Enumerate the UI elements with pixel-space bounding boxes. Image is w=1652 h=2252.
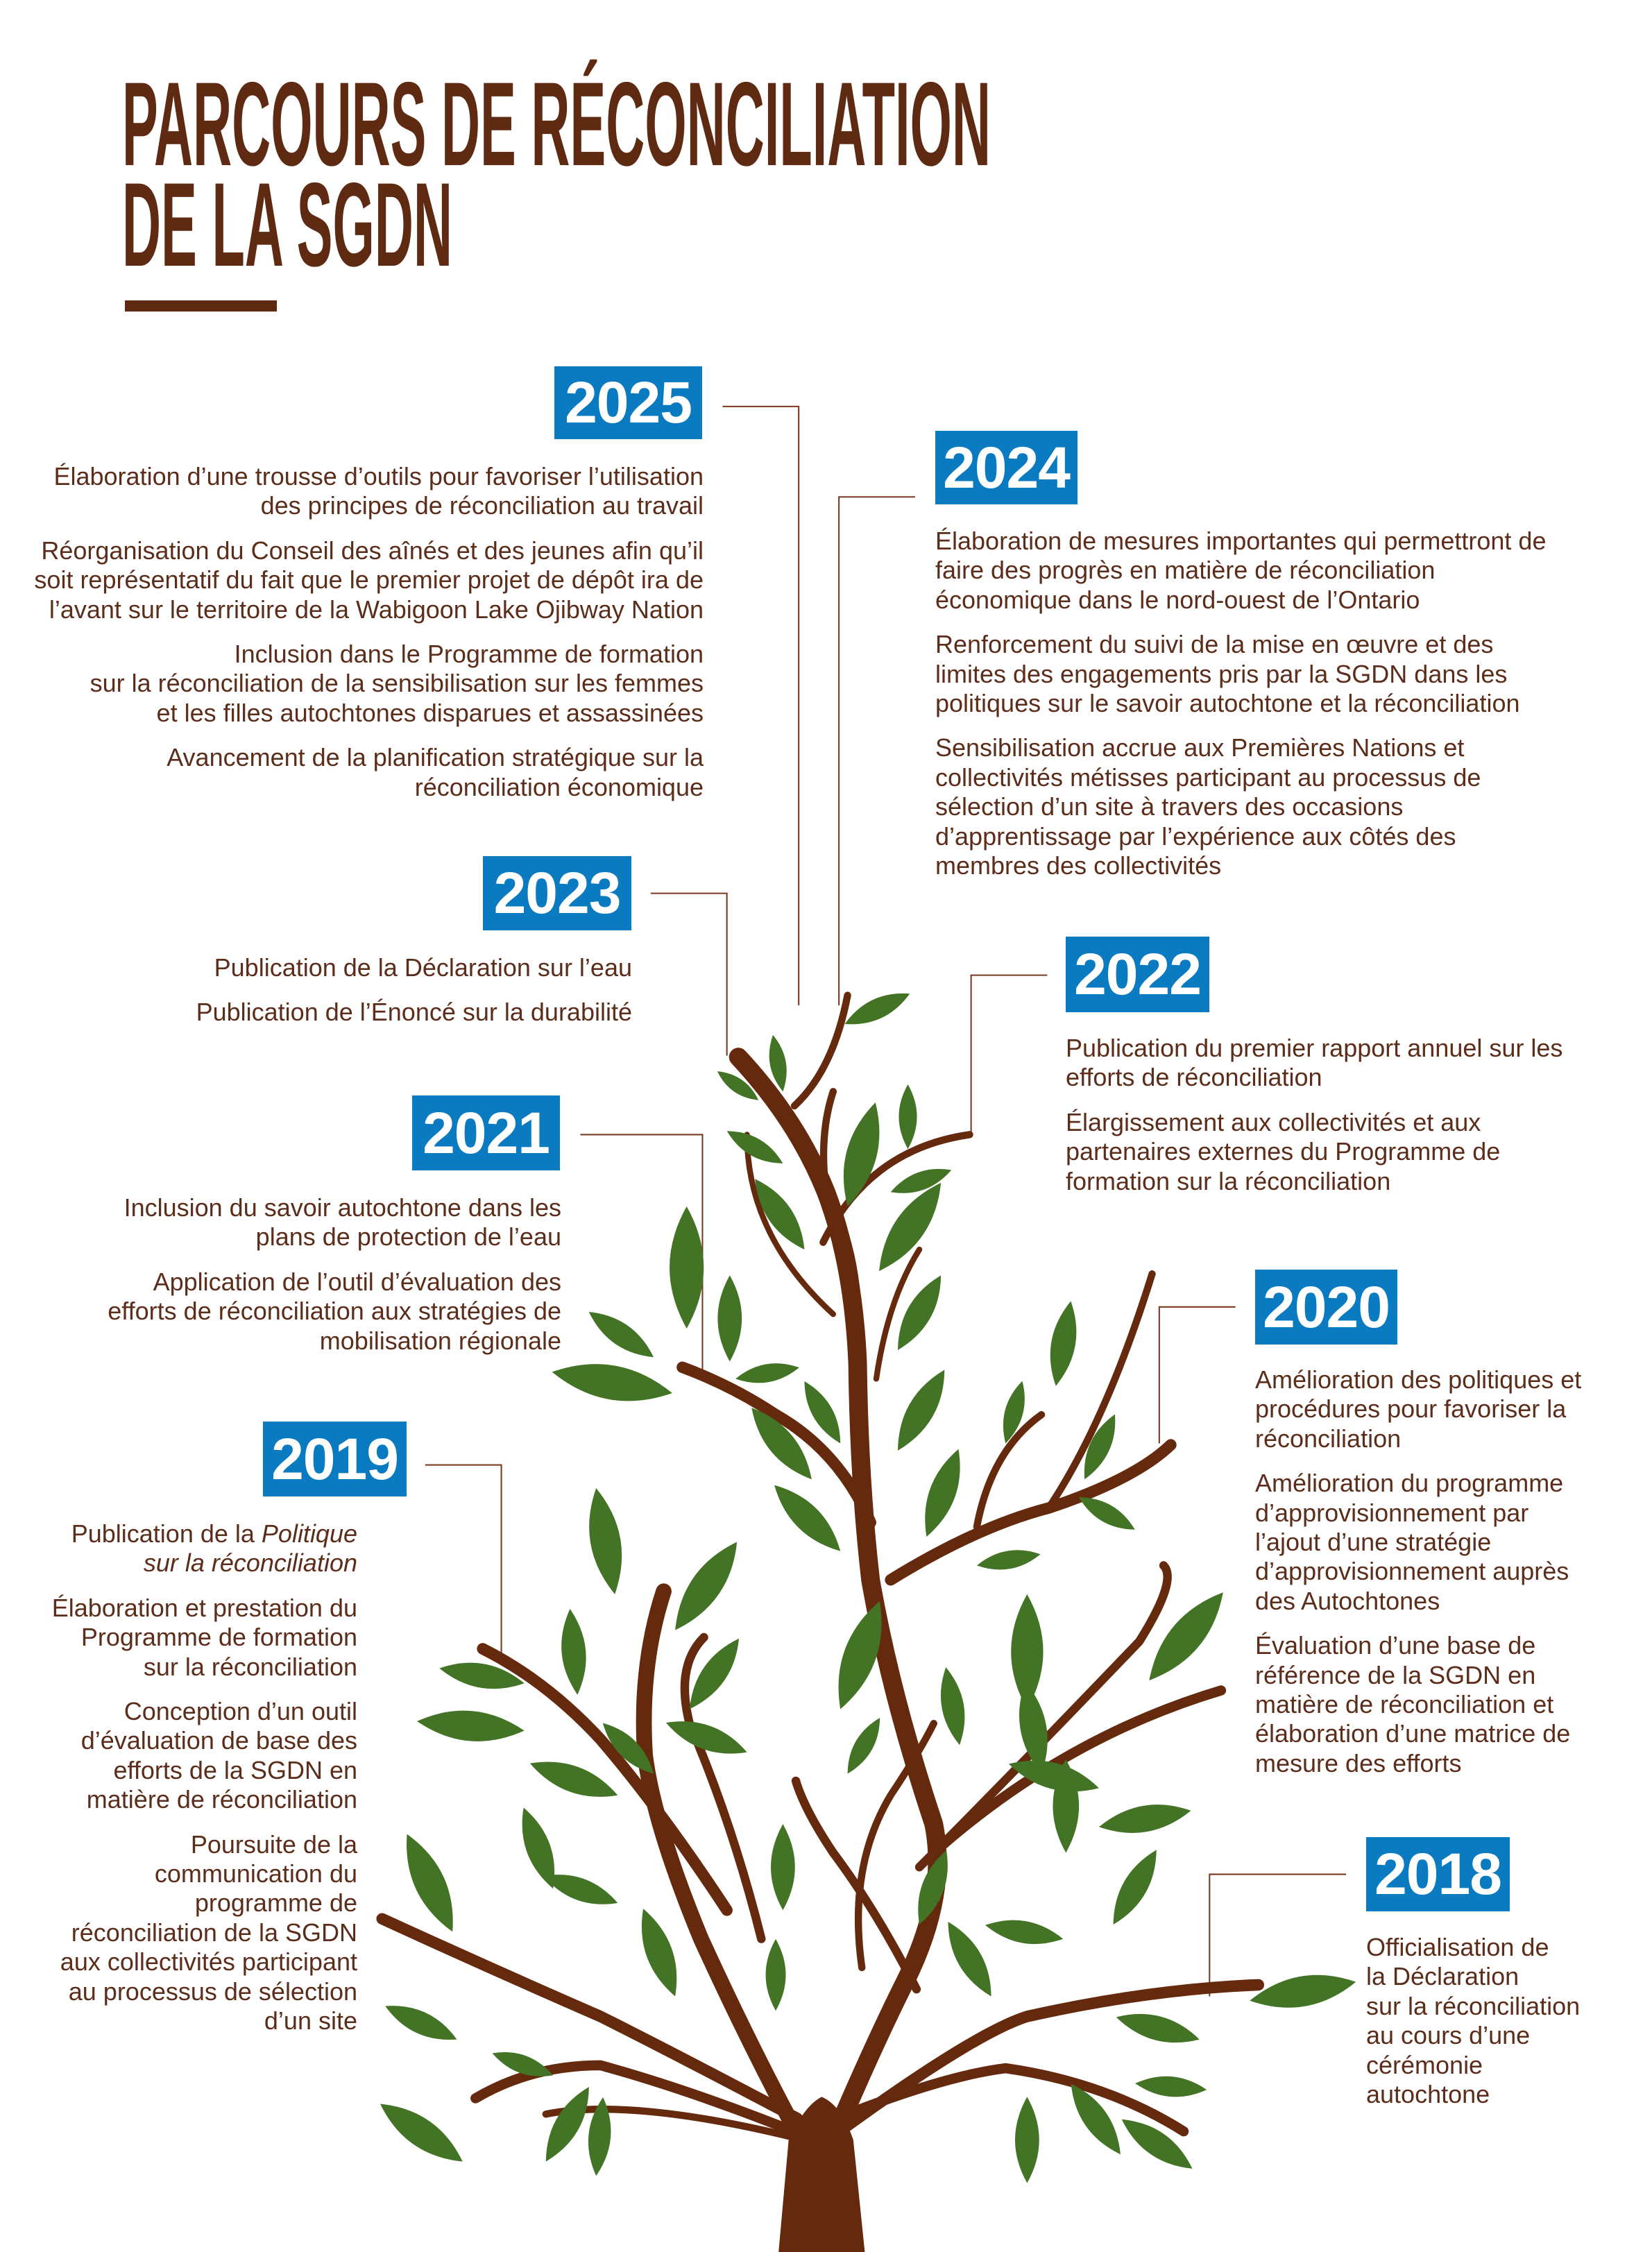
text 2018: sur la réconciliation xyxy=(1366,1992,1580,2020)
year 2025: 2025 xyxy=(565,370,692,435)
text 2019: Élaboration et prestation du xyxy=(52,1594,357,1622)
text 2022: Publication du premier rapport annuel sur les xyxy=(1066,1034,1562,1062)
text 2019: efforts de la SGDN en xyxy=(113,1756,357,1784)
text 2019: Publication de la Politique xyxy=(71,1519,357,1548)
text 2020: l’ajout d’une stratégie xyxy=(1255,1528,1491,1556)
text 2024: économique dans le nord-ouest de l’Ontario xyxy=(935,586,1420,614)
text 2025: soit représentatif du fait que le premier projet de dépôt ira de xyxy=(34,565,704,594)
text 2018: autochtone xyxy=(1366,2080,1490,2108)
year 2019: 2019 xyxy=(271,1426,398,1492)
text 2020 xyxy=(1255,1365,1581,1777)
text 2018: au cours d’une xyxy=(1366,2021,1530,2049)
text 2025: Réorganisation du Conseil des aînés et des jeunes afin qu’il xyxy=(41,536,704,565)
text 2020: procédures pour favoriser la xyxy=(1255,1394,1566,1423)
text 2021: Inclusion du savoir autochtone dans les xyxy=(124,1193,561,1222)
text 2023 xyxy=(196,953,632,1026)
tree branches xyxy=(382,996,1259,2252)
text 2020: matière de réconciliation et xyxy=(1255,1690,1553,1718)
text 2024: faire des progrès en matière de réconciliation xyxy=(935,556,1435,584)
text 2025: des principes de réconciliation au travail xyxy=(261,491,704,520)
text 2019: matière de réconciliation xyxy=(87,1785,357,1814)
text 2024: Sensibilisation accrue aux Premières Nations et xyxy=(935,733,1464,762)
text 2021: mobilisation régionale xyxy=(320,1327,561,1355)
text 2023: Publication de l’Énoncé sur la durabilité xyxy=(196,998,632,1026)
text 2020: réconciliation xyxy=(1255,1424,1401,1453)
text 2024: collectivités métisses participant au processus de xyxy=(935,763,1481,792)
title underline xyxy=(125,300,277,312)
text 2021: efforts de réconciliation aux stratégies de xyxy=(108,1297,561,1325)
text 2025: sur la réconciliation de la sensibilisation sur les femmes xyxy=(90,669,704,697)
text 2019: d’un site xyxy=(264,2006,357,2035)
year 2020: 2020 xyxy=(1263,1274,1390,1339)
text 2025: et les filles autochtones disparues et assassinées xyxy=(157,699,704,727)
text 2025: Avancement de la planification stratégique sur la xyxy=(167,743,704,771)
text 2020: Amélioration du programme xyxy=(1255,1469,1563,1497)
text 2019: Poursuite de la xyxy=(191,1830,357,1859)
text 2020: d’approvisionnement auprès xyxy=(1255,1557,1569,1585)
text 2021: Application de l’outil d’évaluation des xyxy=(153,1268,561,1296)
text 2020: Amélioration des politiques et xyxy=(1255,1365,1581,1394)
text 2019: au processus de sélection xyxy=(69,1977,357,2006)
text 2019 xyxy=(52,1519,358,2035)
text 2025: Inclusion dans le Programme de formation xyxy=(235,640,704,668)
text 2019: sur la réconciliation xyxy=(144,1653,357,1681)
text 2022: Élargissement aux collectivités et aux xyxy=(1066,1108,1481,1136)
text 2022: efforts de réconciliation xyxy=(1066,1063,1322,1091)
text 2024: Élaboration de mesures importantes qui permettront de xyxy=(935,527,1546,555)
text 2025: Élaboration d’une trousse d’outils pour favoriser l’utilisation xyxy=(53,462,704,491)
title: DE LA SGDN xyxy=(122,158,452,291)
text 2023: Publication de la Déclaration sur l’eau xyxy=(214,953,632,982)
year 2023: 2023 xyxy=(494,860,620,925)
text 2020: d’approvisionnement par xyxy=(1255,1499,1528,1527)
text 2019: programme de xyxy=(195,1888,357,1917)
text 2025: l’avant sur le territoire de la Wabigoon Lake Ojibway Nation xyxy=(49,595,704,624)
text 2019: Conception d’un outil xyxy=(124,1697,357,1725)
text 2022: partenaires externes du Programme de xyxy=(1066,1137,1500,1166)
text 2019: d’évaluation de base des xyxy=(81,1726,357,1755)
leaves xyxy=(372,984,1359,2183)
year 2022: 2022 xyxy=(1074,941,1201,1007)
text 2019: sur la réconciliation xyxy=(144,1549,357,1577)
text 2024: d’apprentissage par l’expérience aux côtés des xyxy=(935,822,1456,851)
text 2024: limites des engagements pris par la SGDN dans les xyxy=(935,660,1507,688)
text 2021: plans de protection de l’eau xyxy=(256,1222,561,1251)
text 2024 xyxy=(935,527,1546,880)
text 2018: Officialisation de xyxy=(1366,1933,1549,1961)
text 2018: cérémonie xyxy=(1366,2051,1483,2079)
text 2021 xyxy=(108,1193,561,1355)
title xyxy=(122,58,991,291)
text 2018 xyxy=(1366,1933,1580,2108)
text 2025: réconciliation économique xyxy=(415,773,704,801)
year 2024: 2024 xyxy=(943,434,1070,500)
text 2020: des Autochtones xyxy=(1255,1587,1440,1615)
text 2019: aux collectivités participant xyxy=(60,1947,357,1976)
connectors xyxy=(425,407,1346,1997)
text 2020: mesure des efforts xyxy=(1255,1749,1461,1777)
text 2024: membres des collectivités xyxy=(935,851,1221,880)
text 2020: référence de la SGDN en xyxy=(1255,1661,1535,1689)
text 2022: formation sur la réconciliation xyxy=(1066,1167,1390,1195)
text 2025 xyxy=(34,462,704,801)
text 2019: communication du xyxy=(155,1859,357,1888)
text 2022 xyxy=(1066,1034,1562,1195)
text 2018: la Déclaration xyxy=(1366,1962,1519,1990)
text 2020: Évaluation d’une base de xyxy=(1255,1631,1535,1660)
year 2018: 2018 xyxy=(1374,1841,1501,1906)
year 2021: 2021 xyxy=(423,1100,550,1166)
text 2019: Programme de formation xyxy=(81,1623,357,1651)
text 2024: politiques sur le savoir autochtone et la réconciliation xyxy=(935,689,1519,717)
text 2024: sélection d’un site à travers des occasions xyxy=(935,792,1403,821)
text 2019: réconciliation de la SGDN xyxy=(71,1918,357,1947)
text 2024: Renforcement du suivi de la mise en œuvre et des xyxy=(935,630,1493,658)
text 2020: élaboration d’une matrice de xyxy=(1255,1719,1570,1748)
